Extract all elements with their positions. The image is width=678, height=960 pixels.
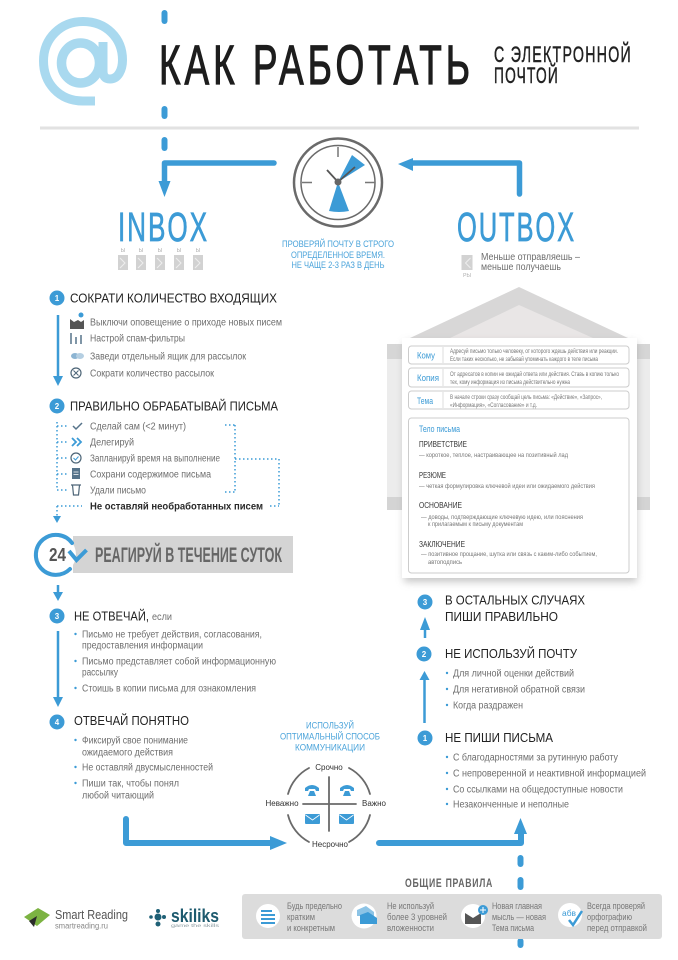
matrix labels [265,763,387,849]
field: copy: тех, кому информация из письма действительно нужна [450,379,571,386]
clock caption: НЕ ЧАЩЕ 2-3 РАЗ В ДЕНЬ [292,260,384,271]
outbox note [481,252,580,273]
rule 3: Тема письма [492,923,534,933]
letter body: ОСНОВАНИЕ [419,501,462,510]
rule 4: абв [562,909,576,918]
field: to: Кому [417,350,435,362]
logo: skiliks [149,906,220,928]
matrix caption [280,720,380,754]
letter body: — доводы, подтверждающие ключевую идею, или пояснения [421,515,583,521]
icon: save document [72,468,80,479]
step 4: reply clearly [50,713,213,802]
arrow up [420,671,430,723]
number badge 4: 4 [55,718,60,727]
matrix labels: Важно [362,799,387,808]
number badge 3: 3 [423,598,428,607]
number badge 2: 2 [55,402,60,411]
step 4 bullets: Пиши так, чтобы понял [82,778,179,790]
rule 3 [461,901,546,933]
number badge 1 [418,730,432,746]
step 1 list: Выключи оповещение о приходе новых писем [90,318,282,328]
field: to [408,346,629,364]
banner: respond within 24 hours [36,534,293,575]
step 4 bullets: любой читающий [82,790,154,802]
letter body: к прилагаемым к письму документам [428,522,523,528]
inbox letter icons [118,248,203,270]
number badge 1: 1 [55,294,60,303]
inbox letter icons: Ы [196,248,201,254]
letter body: ЗАКЛЮЧЕНИЕ [419,540,465,549]
step 2 list: Удали письмо [90,486,146,496]
icon: clock [294,138,382,226]
heading: inbox: INBOX [118,204,209,250]
outbox step 3 heading [445,592,585,624]
icon: phones [305,785,354,796]
matrix labels: Неважно [265,799,299,808]
step 1 list: Заведи отдельный ящик для рассылок [90,352,247,362]
arrow: dotted tip [53,516,61,523]
clock caption: ОПРЕДЕЛЕННОЕ ВРЕМЯ. [291,250,385,261]
number badge 3: 3 [55,612,60,621]
outbox step 2 heading: НЕ ИСПОЛЬЗУЙ ПОЧТУ [445,646,578,661]
matrix labels: Несрочно [312,840,349,849]
letter body [408,418,629,573]
step 2 list: Сделай сам (<2 минут) [90,422,186,432]
outbox step 2 bullets [446,668,585,712]
number badge 4 [50,714,64,730]
logo: smart reading: smartreading.ru [55,922,108,930]
field: copy [408,368,629,387]
step 2 list: Сохрани содержимое письма [90,470,211,480]
dotted connectors [57,422,279,516]
matrix ring and axes [288,768,370,842]
icon: unsubscribe [71,368,81,378]
outbox step 3 heading: В ОСТАЛЬНЫХ СЛУЧАЯХ [445,592,585,608]
arrow: clock to inbox [158,163,274,197]
letter body: — позитивное прощание, шутка или связь с каким-либо событием, [421,552,597,558]
step 3 bullets: Стоишь в копии письма для ознакомления [82,684,256,694]
outbox step 2 bullets: Для личной оценки действий [453,668,574,680]
arrow: matrix to outbox rules [379,818,527,843]
step 1 list [90,318,282,380]
step 3 bullets: рассылку [82,668,118,678]
rule 4 [558,901,647,933]
field: subject: «Информация», «Согласование» и т.д. [450,403,537,409]
step 2 list: Запланируй время на выполнение [90,454,220,464]
outbox step 3 heading: ПИШИ ПРАВИЛЬНО [445,609,558,624]
matrix labels: Срочно [315,763,343,772]
icon: at sign [44,22,122,101]
arrow: short down [53,585,63,601]
letter sheet [402,338,637,578]
spine dashes: bottom [518,855,524,948]
step 3: do not reply [50,608,276,707]
step 1 heading: СОКРАТИ КОЛИЧЕСТВО ВХОДЯЩИХ [70,290,277,306]
step 4 bullets [74,736,213,802]
outbox step 1 bullets: С благодарностями за рутинную работу [453,752,618,764]
title: КАК РАБОТАТЬ [159,33,474,96]
rule 4: орфографию [587,912,632,922]
step 1 list: Сократи количество рассылок [90,368,215,380]
rule 2: более 3 уровней [387,912,447,922]
number badge 1: 1 [423,734,428,743]
step 4 bullets: Не оставляй двусмысленностей [82,762,213,774]
envelope back [387,287,650,510]
step 3 bullets: Письмо представляет собой информационную [82,656,276,668]
panel: general rules [242,894,662,939]
number badge 2 [416,646,432,662]
rule 1: и конкретным [287,923,335,933]
icon: spam filter [71,333,81,344]
heading suffix: если [152,612,172,623]
field: subject [408,391,629,409]
icon: schedule [71,453,81,463]
rule 3: мысль — новая [492,912,546,922]
logo: smart reading: Smart Reading [55,908,128,922]
outbox step 1 heading: НЕ ПИШИ ПИСЬМА [445,730,553,745]
outbox step 1 bullets: Со ссылками на общедоступные новости [453,784,623,796]
rule 2: Не используй [387,901,434,911]
number badge 3 [50,608,64,624]
envelope with letter template [387,287,650,582]
inbox step 2 [50,398,279,523]
rule 4: перед отправкой [587,923,647,933]
inbox letter icons: Ы [139,248,144,254]
field: copy: От адресатов в копии не ожидай ответа или действия. Ставь в копию только [450,371,620,378]
number badge 3 [418,594,432,610]
step 3 bullets: предоставления информации [82,640,203,652]
outbox letter icon: РЫ [463,273,471,279]
arrow: outbox to clock [398,158,520,194]
banner: respond within 24 hours: РЕАГИРУЙ В ТЕЧЕНИЕ СУТОК [95,543,282,567]
outbox note: Меньше отправляешь – [481,252,580,263]
arrow: to communication matrix [126,819,287,850]
outbox step 2 bullets: Для негативной обратной связи [453,684,585,696]
step 4 bullets: Фиксируй свое понимание [82,736,188,746]
icon: notification off [70,312,84,329]
matrix caption: ОПТИМАЛЬНЫЙ СПОСОБ [280,730,380,742]
field: copy: Копия [417,373,439,384]
arrow down [53,315,63,386]
rule 1 [256,901,342,933]
outbox step 2 [416,646,585,723]
letter body: — короткое, теплое, настраивающее на позитивный лад [419,452,568,459]
banner: respond within 24 hours: 24 [49,545,66,565]
communication matrix [265,720,387,849]
step 2 list: Не оставляй необработанных писем [90,500,263,512]
inbox letter icons: Ы [158,248,163,254]
logo: skiliks: game the skills [171,923,220,928]
number badge 2 [50,398,64,414]
step 3 bullets [74,628,276,694]
clock caption [282,238,394,271]
outbox step 1 bullets [446,752,646,810]
step 3 heading: НЕ ОТВЕЧАЙ, [74,608,149,624]
heading: general rules: ОБЩИЕ ПРАВИЛА [405,876,493,890]
rule 1: кратким [287,912,315,922]
icon: delegate [72,438,81,446]
outbox letter icon [462,255,472,279]
step 3 bullets: Письмо не требует действия, согласования, [82,628,262,640]
rule 1: Будь предельно [287,901,342,911]
letter body: Тело письма [419,424,460,434]
arrow down [53,631,63,707]
field: subject: В начале строки сразу сообщай цель письма: «Действие», «Запрос», [450,394,602,401]
number badge 2: 2 [422,650,427,659]
outbox step 1 bullets: С непроверенной и неактивной информацией [453,768,646,780]
outbox step 2 bullets: Когда раздражен [453,700,523,712]
clock caption: ПРОВЕРЯЙ ПОЧТУ В СТРОГО [282,238,394,250]
field: to: Если таких несколько, не забывай упоминать каждого в теле письма [450,356,599,363]
matrix caption: КОММУНИКАЦИИ [295,742,365,754]
rule 4: Всегда проверяй [587,901,645,911]
step 4 heading: ОТВЕЧАЙ ПОНЯТНО [74,713,189,728]
inbox letter icons: Ы [177,248,182,254]
rule 2 [352,901,447,933]
step 1 list: Настрой спам-фильтры [90,332,185,344]
step 2 heading: ПРАВИЛЬНО ОБРАБАТЫВАЙ ПИСЬМА [70,398,278,414]
matrix caption: ИСПОЛЬЗУЙ [306,720,354,732]
inbox letter icons: Ы [121,248,126,254]
icon: separate box [71,353,84,359]
title: ПОЧТОЙ [494,63,559,88]
outbox step 1 [418,730,646,810]
step 2 list: Делегируй [90,438,134,448]
outbox note: меньше получаешь [481,262,561,273]
arrow up [420,617,430,638]
rule 2: вложенности [387,923,434,933]
step 2 list [90,422,263,512]
step 4 bullets: ожидаемого действия [82,748,173,758]
outbox step 3 [418,592,585,638]
letter body: РЕЗЮМЕ [419,471,446,480]
letter body: автоподпись [428,560,462,566]
field: to: Адресуй письмо только человеку, от которого ждешь действия или реакции. [450,348,618,355]
inbox step 1 [50,290,282,386]
number badge 1 [50,290,64,306]
letter body: ПРИВЕТСТВИЕ [419,440,467,449]
icon: envelopes [305,814,354,824]
rule 3: Новая главная [492,901,542,911]
outbox step 1 bullets: Незаконченные и неполные [453,800,569,810]
icon: trash [71,485,81,495]
logo: smart reading [24,908,128,930]
icon: check [73,423,82,429]
logo: skiliks: skiliks [171,906,219,926]
field: subject: Тема [417,396,434,407]
heading: outbox: OUTBOX [457,204,576,250]
letter body: — четкая формулировка ключевой идеи или ожидаемого действия [419,483,595,490]
spine dashes: top [162,10,168,151]
